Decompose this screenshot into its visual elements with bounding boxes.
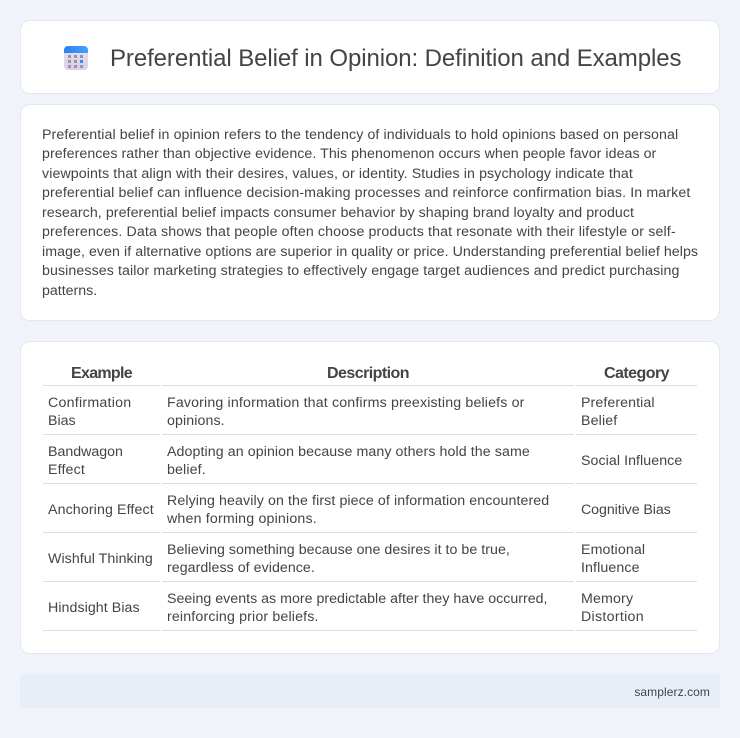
- row: Wishful Thinking: Emotional: [581, 542, 645, 558]
- panel: intro paragraph: research, preferential belief impacts consumer behavior by shaping brand loyalty and product: [42, 205, 634, 221]
- panel: intro paragraph: patterns.: [42, 283, 97, 299]
- table header: Description: [327, 365, 409, 382]
- row: Wishful Thinking: Believing something because one desires it to be true,: [167, 542, 510, 558]
- row: Anchoring Effect: when forming opinions.: [167, 511, 317, 527]
- panel: intro paragraph: Preferential belief in opinion refers to the tendency of individuals to hold opinions based on personal: [42, 127, 678, 143]
- row: Confirmation Bias: [48, 395, 655, 429]
- row: Confirmation Bias: Belief: [581, 413, 617, 429]
- table header: [71, 365, 670, 382]
- row: Hindsight Bias: Memory: [581, 591, 633, 607]
- row: Hindsight Bias: Seeing events as more predictable after they have occurred,: [167, 591, 548, 607]
- row: Bandwagon Effect: Effect: [48, 462, 85, 478]
- table header: Example: [71, 365, 132, 382]
- row: Anchoring Effect: Anchoring Effect: [48, 502, 154, 518]
- row: Bandwagon Effect: belief.: [167, 462, 206, 478]
- row: Hindsight Bias: Hindsight Bias: [48, 600, 140, 616]
- row: Bandwagon Effect: Bandwagon: [48, 444, 123, 460]
- row: Wishful Thinking: Wishful Thinking: [48, 551, 153, 567]
- row: Bandwagon Effect: Social Influence: [581, 453, 682, 469]
- row: Hindsight Bias: Distortion: [581, 609, 644, 625]
- row: Bandwagon Effect: Adopting an opinion because many others hold the same: [167, 444, 530, 460]
- row: Anchoring Effect: [48, 493, 671, 527]
- panel: intro paragraph: businesses tailor marketing strategies to effectively engage target audiences and predict purchasing: [42, 263, 680, 279]
- row: Wishful Thinking: Influence: [581, 560, 640, 576]
- panel: intro paragraph: [20, 104, 720, 321]
- row: Confirmation Bias: Confirmation: [48, 395, 131, 411]
- footer credit: samplerz.com: [634, 685, 710, 699]
- row: Confirmation Bias: Bias: [48, 413, 76, 429]
- panel: intro paragraph: preferences rather than objective evidence. This phenomenon occurs when people favor ideas or: [42, 146, 656, 162]
- panel: intro paragraph: image, even if alternative options are superior in quality or price. Understanding preferential belief helps: [42, 244, 698, 260]
- icon: calendar: [64, 46, 88, 70]
- row: Confirmation Bias: Favoring information that confirms preexisting beliefs or: [167, 395, 525, 411]
- header panel: [20, 20, 720, 94]
- panel: intro paragraph: preferential belief can influence decision-making processes and reinforce confirmation bias. In market: [42, 185, 690, 201]
- row: Wishful Thinking: [48, 542, 645, 576]
- row: Hindsight Bias: reinforcing prior beliefs.: [167, 609, 319, 625]
- row: Confirmation Bias: opinions.: [167, 413, 225, 429]
- row: Confirmation Bias: Preferential: [581, 395, 655, 411]
- row: Bandwagon Effect: [48, 444, 682, 478]
- row: Hindsight Bias: [48, 591, 644, 625]
- table header: Category: [604, 365, 669, 382]
- title: Preferential Belief in Opinion: Definition and Examples: [110, 45, 681, 72]
- row: Anchoring Effect: Relying heavily on the first piece of information encountered: [167, 493, 549, 509]
- panel: intro paragraph: viewpoints that align with their desires, values, or identity. Studies in psychology indicate that: [42, 166, 633, 182]
- footer: [20, 674, 720, 708]
- row: Wishful Thinking: regardless of evidence.: [167, 560, 315, 576]
- row: Anchoring Effect: Cognitive Bias: [581, 502, 671, 518]
- panel: intro paragraph: preferences. Data shows that people often choose products that resonate with their lifestyle or self-: [42, 224, 676, 240]
